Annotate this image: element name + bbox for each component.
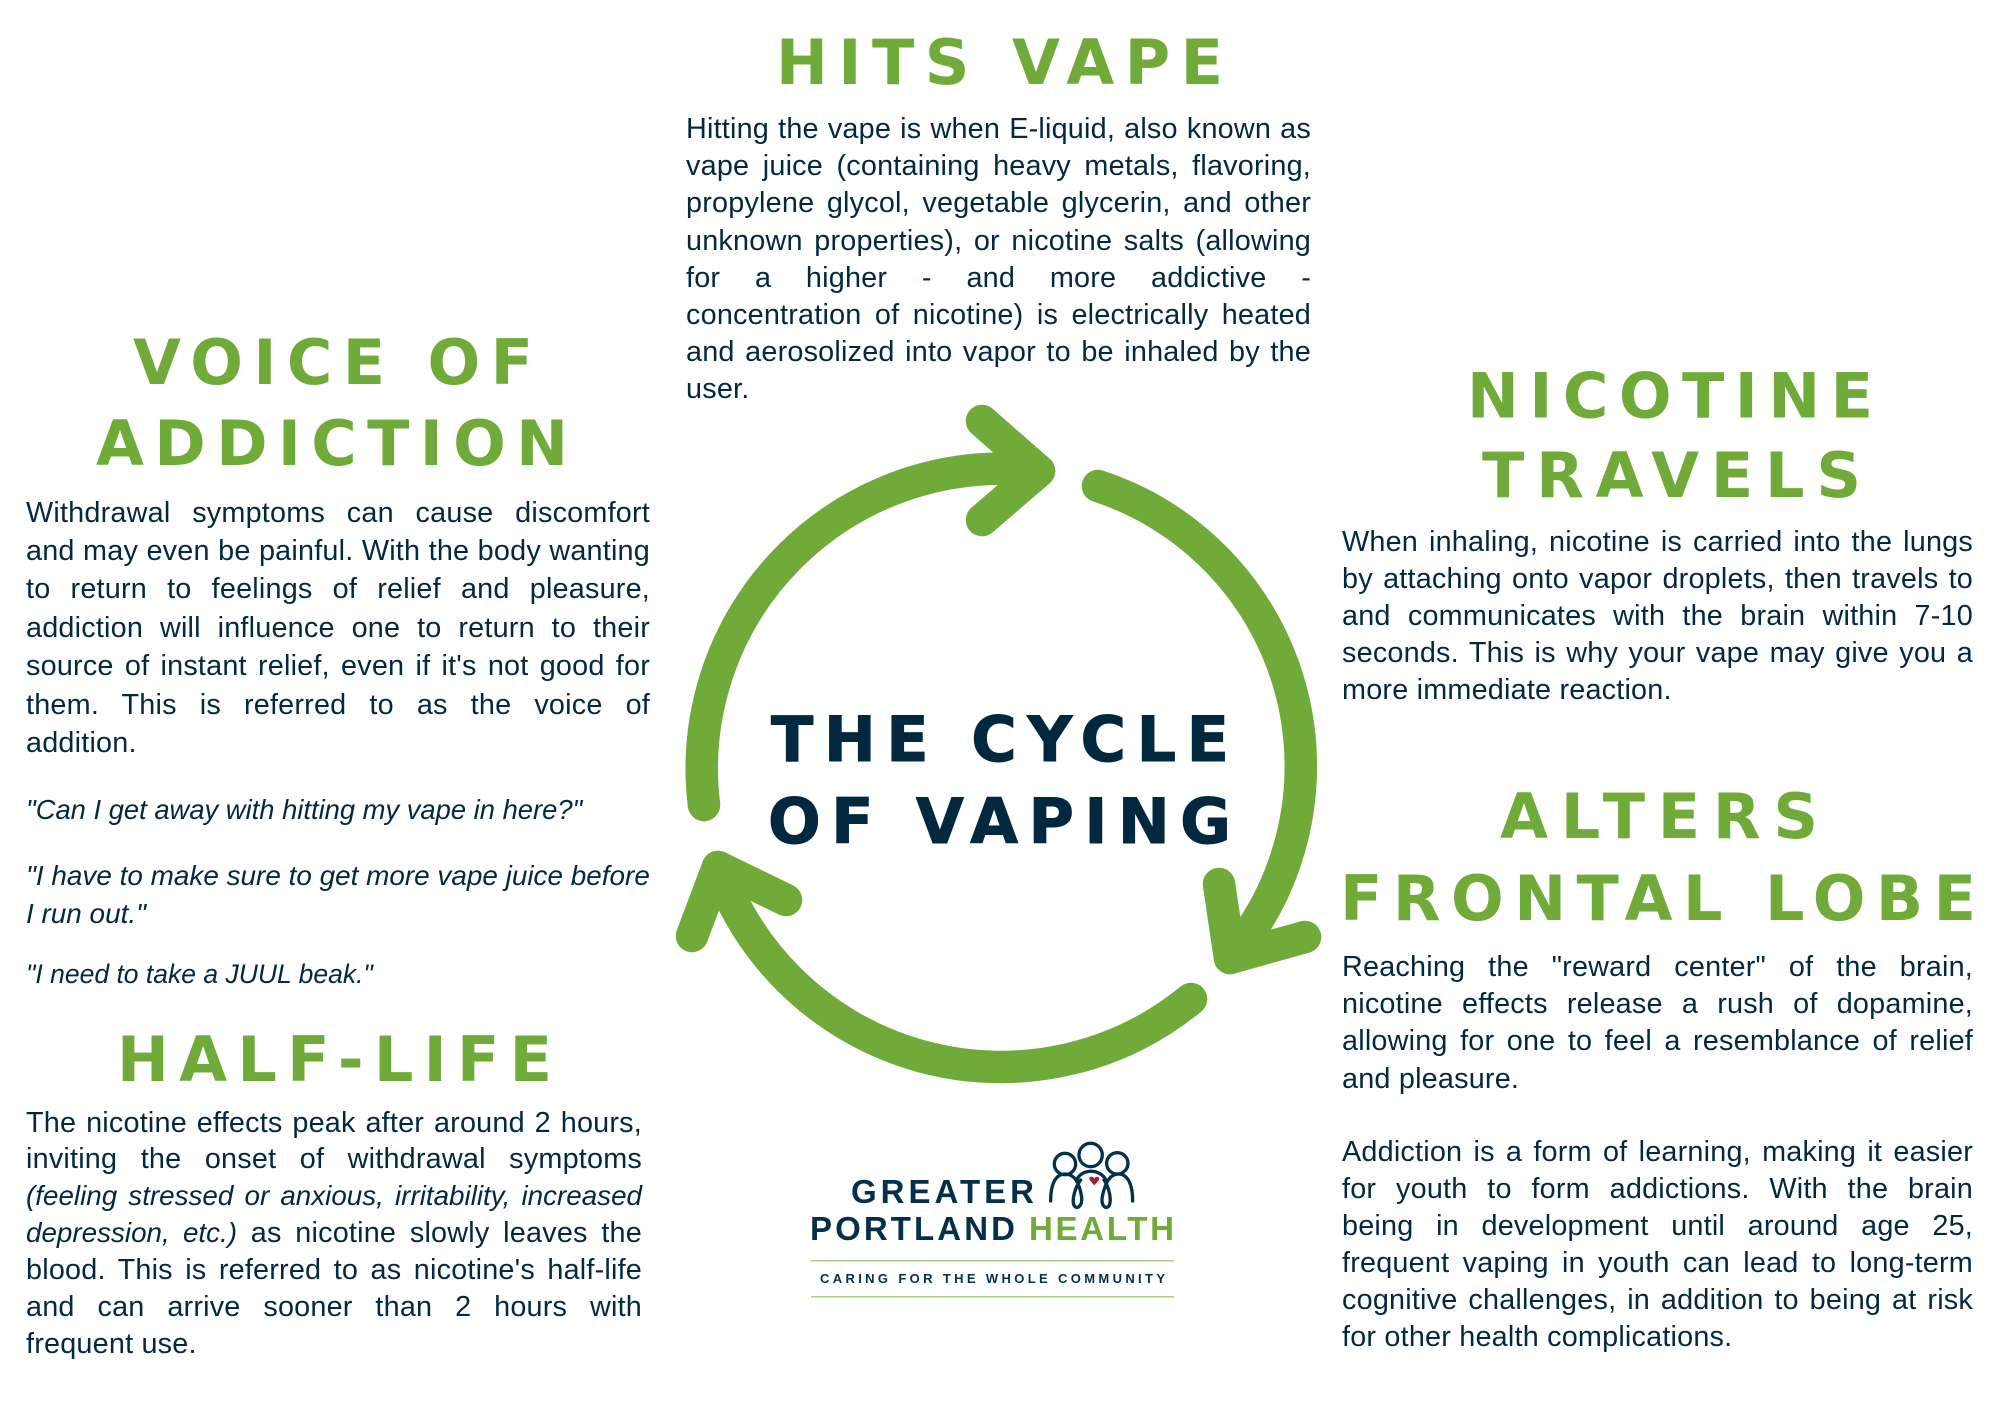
logo: greater portland health: HEALTH	[1029, 1210, 1174, 1247]
text block: hits vape: unknown properties), or nicotine salts (allowing	[686, 225, 1311, 257]
text block: half-life: blood. This is referred to as nicotine's half-life	[26, 1254, 642, 1286]
text block: alters frontal lobe, learning: Addiction is a form of learning, making it easier	[1342, 1136, 1973, 1168]
arrow: bottom to left	[692, 867, 1191, 1067]
heading: half-life: HALF-LIFE	[117, 1023, 552, 1096]
text block: hits vape: propylene glycol, vegetable glycerin, and other	[686, 187, 1311, 219]
text block: half-life: and can arrive sooner than 2 hours with	[26, 1291, 642, 1323]
text block: alters frontal lobe, reward center: and pleasure.	[1342, 1063, 1519, 1095]
text block: alters frontal lobe, learning: for other health complications.	[1342, 1321, 1732, 1353]
heading: voice of addiction	[96, 326, 568, 480]
text block: alters frontal lobe, reward center: allowing for one to feel a resemblance of relief	[1342, 1025, 1973, 1057]
heading: alters frontal lobe: ALTERS	[1500, 780, 1818, 853]
text block: nicotine travels: by attaching onto vapor droplets, then travels to	[1342, 563, 1973, 595]
quotes: voice of addiction: "I need to take a JUUL beak."	[26, 959, 373, 989]
heading: nicotine travels: TRAVELS	[1482, 439, 1861, 512]
heading: nicotine travels	[1467, 360, 1873, 512]
text block: alters frontal lobe, learning: for youth to form addictions. With the brain	[1342, 1173, 1973, 1205]
heading: voice of addiction: ADDICTION	[96, 407, 568, 480]
text block: voice of addiction: addiction will influence one to return to their	[26, 612, 650, 644]
heading: hits vape: HITS VAPE	[776, 26, 1223, 99]
text block: half-life	[26, 1106, 643, 1360]
logo wordmark: GREATER	[851, 1173, 1034, 1210]
text block: hits vape: user.	[686, 373, 749, 405]
text block: voice of addiction: and may even be painful. With the body wanting	[26, 535, 650, 567]
text block: half-life: frequent use.	[26, 1328, 197, 1360]
text block: alters frontal lobe, reward center: Reaching the "reward center" of the brain,	[1342, 951, 1973, 983]
text block: hits vape: concentration of nicotine) is electrically heated	[686, 299, 1311, 331]
title: the cycle of vaping	[768, 703, 1231, 858]
heading: alters frontal lobe	[1340, 780, 1976, 935]
arrow: left to top	[702, 421, 1039, 805]
text block: hits vape: Hitting the vape is when E-liquid, also known as	[686, 113, 1311, 145]
text block: alters frontal lobe, reward center	[1342, 951, 1973, 1095]
text block: alters frontal lobe, learning: being in development until around age 25,	[1342, 1210, 1973, 1242]
text block: nicotine travels	[1342, 526, 1973, 706]
text block: voice of addiction	[26, 496, 650, 759]
text block: half-life: depression, etc.) as nicotine slowly leaves the	[26, 1217, 642, 1249]
quotes: voice of addiction: I run out."	[26, 898, 146, 929]
text block: nicotine travels: and communicates with the brain within 7-10	[1342, 600, 1973, 632]
text block: half-life: (feeling stressed or anxious, irritability, increased	[26, 1180, 642, 1211]
text block: nicotine travels: When inhaling, nicotine is carried into the lungs	[1342, 526, 1973, 558]
text block: voice of addiction: to return to feelings of relief and pleasure,	[26, 573, 650, 605]
text block: voice of addiction: them. This is referred to as the voice of	[26, 689, 650, 721]
title: the cycle of vaping: OF VAPING	[768, 785, 1231, 858]
logo: greater portland health: PORTLAND	[810, 1210, 1015, 1247]
text block: alters frontal lobe, learning: cognitive challenges, in addition to being at risk	[1342, 1284, 1973, 1316]
text block: voice of addiction: addition.	[26, 727, 137, 759]
text block: voice of addiction: Withdrawal symptoms can cause discomfort	[26, 496, 650, 528]
text block: half-life: The nicotine effects peak after around 2 hours,	[26, 1106, 642, 1138]
logo tagline: CARING FOR THE WHOLE COMMUNITY	[820, 1271, 1165, 1286]
text block: alters frontal lobe, learning: frequent vaping in youth can lead to long-term	[1342, 1247, 1973, 1279]
logo icon: three people with heart	[1051, 1143, 1133, 1207]
title: the cycle of vaping: THE CYCLE	[771, 703, 1229, 776]
quotes: voice of addiction: "Can I get away with hitting my vape in here?"	[26, 794, 582, 824]
text block: nicotine travels: seconds. This is why your vape may give you a	[1342, 637, 1973, 669]
logo: greater portland health	[810, 1143, 1174, 1298]
heading: nicotine travels: NICOTINE	[1467, 360, 1873, 432]
arrow: top to right	[1098, 486, 1305, 958]
text block: alters frontal lobe, learning	[1342, 1136, 1973, 1353]
text block: alters frontal lobe, reward center: nicotine effects release a rush of dopamine,	[1342, 988, 1973, 1020]
quotes: voice of addiction	[26, 794, 650, 989]
text block: hits vape: for a higher - and more addictive -	[686, 262, 1311, 294]
text block: hits vape	[686, 113, 1311, 405]
text block: hits vape: and aerosolized into vapor to be inhaled by the	[686, 336, 1311, 368]
heading: voice of addiction: VOICE OF	[133, 326, 533, 399]
text block: nicotine travels: more immediate reaction.	[1342, 674, 1672, 706]
text block: voice of addiction: source of instant relief, even if it's not good for	[26, 650, 650, 682]
quotes: voice of addiction: "I have to make sure to get more vape juice before	[26, 860, 650, 891]
text block: half-life: inviting the onset of withdrawal symptoms	[26, 1143, 642, 1175]
text block: hits vape: vape juice (containing heavy metals, flavoring,	[686, 150, 1311, 182]
heading: alters frontal lobe: FRONTAL LOBE	[1340, 862, 1976, 935]
cycle arrows	[692, 421, 1305, 1067]
